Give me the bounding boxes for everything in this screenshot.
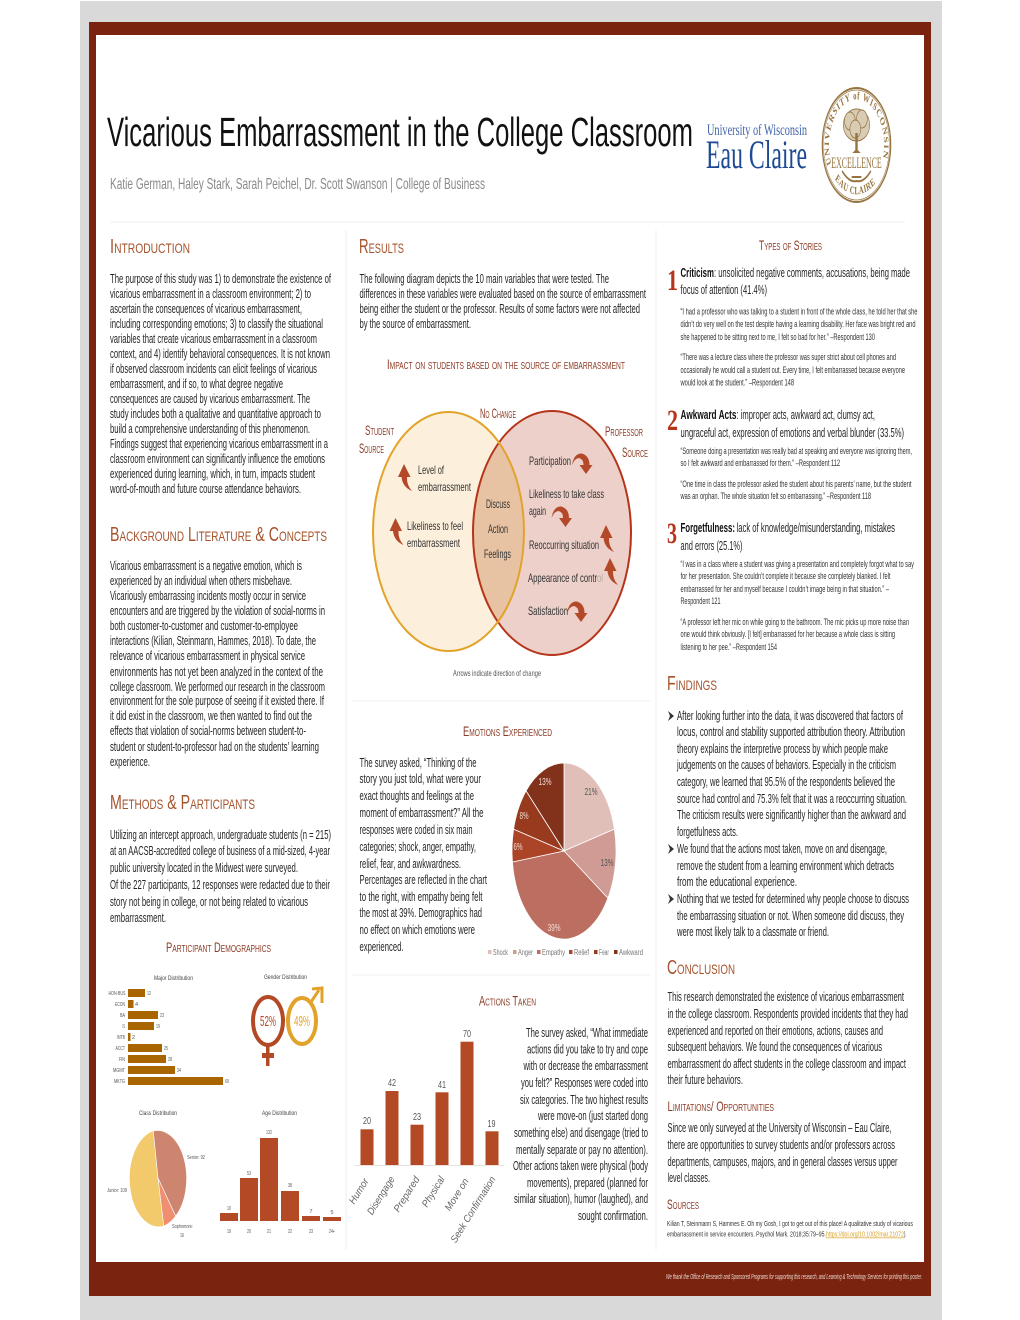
venn diagram: Reoccurring situation <box>529 538 599 552</box>
text block: introduction: word-of-mouth and future course attendance behaviors. <box>109 482 301 496</box>
pie chart: class distribution: Senior: 92 <box>187 1155 205 1161</box>
story 3: forgetfulness <box>667 517 914 652</box>
text block: methods: story not being in college, or not being related to vicarious <box>110 895 308 909</box>
heading: methods and participants: Methods & Participants <box>110 792 255 814</box>
bar chart: major distribution: 2 <box>132 1035 135 1041</box>
icon: gender distribution <box>253 975 322 1066</box>
logo: University of Wisconsin Eau Claire: University of Wisconsin <box>707 122 807 139</box>
logo: University of Wisconsin Eau Claire <box>706 122 807 177</box>
bar chart: major distribution: 12 <box>147 991 151 997</box>
heading: findings: Findings <box>667 673 717 695</box>
venn diagram: Action <box>488 522 508 536</box>
bar chart: actions taken: 19 <box>488 1119 496 1130</box>
bar chart: actions taken: 42 <box>388 1078 396 1089</box>
bar chart: age distribution <box>220 1111 341 1235</box>
text block: introduction: context, and 4) identify behavioral consequences. It is not known <box>110 347 330 361</box>
story 1: criticism: focus of attention (41.4%) <box>680 283 767 297</box>
text block: actions: movements), prepared (planned for <box>527 1176 648 1190</box>
bar chart: age distribution: 22 <box>288 1229 292 1235</box>
icon: university seal <box>822 87 892 203</box>
text block: results: differences in these variables were evaluated based on the source of embarrassment <box>360 287 646 301</box>
text block: background: environment for the sole purpose of seeing if it existed there. If <box>110 694 324 708</box>
pie chart: emotions: 21% <box>584 787 598 798</box>
venn diagram: embarrassment <box>407 536 460 550</box>
bar chart: major distribution: MGMT <box>113 1068 125 1074</box>
arrow: level of embarrassment up <box>398 464 412 491</box>
text block: actions: The survey asked, “What immediate <box>526 1026 648 1040</box>
pie chart: emotions: 39% <box>548 923 561 934</box>
text block: introduction: consequences are caused by vicarious embarrassment. The <box>110 392 310 406</box>
text block: actions: actions did you take to try and cope <box>527 1043 648 1057</box>
text block: introduction: if observed classroom incidents can elicit feelings of vicarious <box>110 362 317 376</box>
venn diagram: Professor <box>605 423 643 439</box>
text block: actions: were move-on (just started dong <box>537 1109 648 1123</box>
caption: arrows note: Arrows indicate direction of change <box>453 668 541 678</box>
text block: background: student or student-to-professor had on the students’ learning <box>110 740 319 754</box>
text block: actions: sought confirmation. <box>578 1209 648 1223</box>
text block: conclusion: experienced and reported on their emotions, actions, causes and <box>668 1024 883 1038</box>
bar chart: major distribution: ECON <box>115 1002 125 1008</box>
text block: results: The following diagram depicts the 10 main variables that were tested. The <box>360 272 609 286</box>
icon: gender distribution: Gender Distribution <box>264 975 307 981</box>
text block: emotions <box>360 756 487 954</box>
text block: background: Vicariously embarrassing incidents mostly occur in service <box>110 589 306 603</box>
text block: results: by the source of embarrassment. <box>360 317 471 331</box>
text block: methods: at an AACSB-accredited college of business of a mid-sized, 4-year <box>110 844 330 858</box>
bar chart: actions taken: Prepared <box>392 1174 423 1215</box>
bar chart: actions taken: 23 <box>413 1112 421 1123</box>
bar chart: age distribution: 5 <box>330 1210 334 1216</box>
venn diagram: again <box>529 504 546 518</box>
icon: university seal: EXCELLENCE <box>831 153 882 172</box>
pie chart: emotions: 13% <box>538 777 552 788</box>
bar chart: actions taken: 41 <box>438 1080 446 1091</box>
text block: background: college classroom. We performed our research in the classroom <box>110 680 325 694</box>
story 3: forgetfulness: one would think obviously. [I felt] embarrassed for her because a whole class is sitting <box>680 629 895 639</box>
story 2: awkward acts: Awkward Acts <box>680 408 737 422</box>
text block: introduction: vicarious embarrassment in a classroom environment; 2) to <box>110 287 311 301</box>
story 2: awkward acts: was an orphan. The whole situation felt so embarrassing.” –Respondent 118 <box>680 491 871 501</box>
heading: results: Results <box>359 236 404 258</box>
venn diagram: Source <box>359 440 384 456</box>
story 3: forgetfulness: embarrassed for her and myself because I couldn’t image being in that situation.” – <box>680 584 889 594</box>
text block: actions: Other actions taken were physical (body <box>513 1159 648 1173</box>
text block: sources: ). <box>904 1232 907 1238</box>
bar chart: major distribution: ACCT <box>116 1046 125 1052</box>
bar chart: major distribution: 19 <box>156 1024 160 1030</box>
pie chart: class distribution: Sophomore: <box>172 1224 193 1230</box>
text block: background: environments has not yet been analyzed in the context of the <box>110 665 323 679</box>
arrow: likeliness to feel up <box>390 518 404 545</box>
text block: introduction: experienced during learning, which, in turn, impacts student <box>110 467 315 481</box>
text block: introduction: including corresponding emotions; 3) to classify the situational <box>110 317 323 331</box>
pie chart: class distribution: Junior: 109 <box>107 1188 127 1194</box>
text block: methods <box>110 828 331 925</box>
icon: gender distribution: 49% <box>294 1013 310 1030</box>
story 3: forgetfulness: listening to her pee.” –Respondent 154 <box>680 642 777 652</box>
text block: background: interactions (Kilian, Steinmann, Hammes, 2018). To date, the <box>110 634 316 648</box>
story 3: forgetfulness: and errors (25.1%) <box>680 539 742 553</box>
pie chart: emotions <box>512 763 616 939</box>
story 2: awkward acts: : improper acts, awkward act, clumsy act, <box>736 408 875 422</box>
story 1: criticism: 1 <box>667 264 678 297</box>
text block: findings: were most likely talk to a classmate or friend. <box>676 925 829 939</box>
text block: sources: embarrassment in service encounters. Psychol Mark. 2018;35:79–95. <box>667 1232 826 1238</box>
heading: background literature and concepts: Background Literature & Concepts <box>110 524 327 546</box>
venn diagram: embarrassment <box>418 480 471 494</box>
venn diagram: Participation <box>529 454 571 468</box>
story 3: forgetfulness: Forgetfulness: <box>680 521 735 535</box>
poster white panel <box>96 35 924 1262</box>
pie chart: emotions: 13% <box>600 858 614 869</box>
venn diagram: Discuss <box>486 497 510 511</box>
bar chart: major distribution <box>108 976 229 1085</box>
text block: emotions: to the right, with empathy being felt <box>360 890 483 904</box>
chart legend: emotions: Anger <box>518 948 533 957</box>
text block: background: experience. <box>110 755 150 769</box>
bar chart: age distribution: 20 <box>247 1229 251 1235</box>
heading: impact on students: Impact on students based on the source of embarrassment <box>387 356 625 372</box>
text block: findings: remove the student from a learning environment which detracts <box>677 859 894 873</box>
bar chart: major distribution: HON-BUS <box>108 991 126 997</box>
text block: conclusion: subsequent behaviors. We found the consequences of vicarious <box>668 1040 882 1054</box>
text block: methods: public university located in the Midwest were surveyed. <box>110 861 298 875</box>
venn diagram: Likeliness to feel <box>407 519 463 533</box>
bar chart: actions taken: Move on <box>443 1176 472 1213</box>
text block: limitations <box>668 1121 898 1185</box>
bar chart: age distribution: 23 <box>309 1229 313 1235</box>
text block: background: it did exist in the classroom, we then wanted to find out the <box>110 709 312 723</box>
bar chart: actions taken <box>347 1029 504 1245</box>
pie chart: class distribution: 16 <box>180 1233 184 1239</box>
bar chart: age distribution: 10 <box>227 1206 231 1212</box>
heading: sources: Sources <box>667 1196 699 1212</box>
bar chart: actions taken: Humor <box>347 1176 372 1206</box>
chart legend: emotions: Shock <box>493 948 509 957</box>
text block: introduction: classroom environment can significantly influence the emotions <box>110 452 325 466</box>
story 1: criticism: “There was a lecture class where the professor was super strict about cell phones and <box>680 352 896 362</box>
chart legend: emotions: Empathy <box>542 948 565 957</box>
panel: left column <box>107 236 341 1239</box>
bar chart: age distribution: 7 <box>309 1209 313 1215</box>
bar chart: major distribution: Major Distribution <box>154 976 193 982</box>
text block: background: encounters and are triggered by the violation of social-norms in <box>110 604 325 618</box>
heading: conclusion: Conclusion <box>667 957 735 979</box>
title: Vicarious Embarrassment in the College Classroom <box>107 109 693 155</box>
text block: results <box>360 272 646 331</box>
venn diagram <box>359 405 648 655</box>
text block: background: effects that violation of social-norms between student-to- <box>110 724 306 738</box>
chart legend: emotions: Fear <box>599 948 609 957</box>
text block: introduction: study includes both a qualitative and quantitative approach to <box>110 407 321 421</box>
text block: actions: with or decrease the embarrassment <box>523 1059 648 1073</box>
story 1: criticism: would look at the student.” –Respondent 148 <box>680 378 794 388</box>
text block: actions: mentally separate or pay no attention). <box>516 1143 648 1157</box>
story 1: criticism <box>667 264 918 388</box>
icon: university seal: UNIVERSITY of WISCONSIN <box>824 92 888 166</box>
arrow: appearance of control up <box>604 558 618 585</box>
bar chart: major distribution: BA <box>120 1013 125 1019</box>
arrow: reoccurring situation up <box>600 525 614 552</box>
logo: University of Wisconsin Eau Claire: Eau Claire <box>706 132 807 177</box>
heading: introduction: Introduction <box>110 236 190 258</box>
story 3: forgetfulness: 3 <box>667 517 677 550</box>
bar chart: major distribution: 69 <box>225 1079 229 1085</box>
text block: findings: forgetfulness acts. <box>677 825 738 839</box>
icon: university seal: EAU CLAIRE <box>835 174 875 194</box>
text block: sources: https://doi.org/10.1002/mar.21072 <box>826 1232 904 1238</box>
text block: results: being either the student or the professor. Results of some factors were not affected <box>360 302 640 316</box>
venn diagram: Level of <box>418 463 444 477</box>
heading: actions taken: Actions Taken <box>479 992 536 1008</box>
story 2: awkward acts: 2 <box>667 404 678 437</box>
text block: sources <box>667 1221 913 1238</box>
pie chart: class distribution: Class Distribution <box>139 1111 177 1117</box>
text block: actions: six categories. The two highest results <box>520 1093 648 1107</box>
text block: actions: similar situation), humor (laughed), and <box>514 1192 648 1206</box>
heading: limitations and opportunities: Limitations/ Opportunities <box>668 1098 774 1114</box>
arrow: likeliness to take class down <box>552 506 572 527</box>
text block: conclusion <box>668 990 908 1087</box>
arrow: participation down <box>572 453 592 474</box>
icon: gender distribution: 52% <box>260 1013 276 1030</box>
text block: emotions: relief, fear, and awkwardness. <box>360 857 461 871</box>
text block: background: both customer-to-customer and customer-to-employee <box>110 619 298 633</box>
bar chart: actions taken: 20 <box>363 1116 371 1127</box>
bar chart: age distribution: 21 <box>267 1229 271 1235</box>
bar chart: major distribution: 34 <box>177 1068 181 1074</box>
text block: emotions: responses were coded in six main <box>360 823 473 837</box>
arrow: satisfaction down <box>567 601 588 622</box>
venn diagram: Feelings <box>484 547 511 561</box>
text block: emotions: exact thoughts and feelings at the <box>360 789 474 803</box>
text block: actions: you felt?” Responses were coded into <box>521 1076 648 1090</box>
heading: emotions experienced: Emotions Experienced <box>463 723 552 739</box>
venn diagram: Likeliness to take class <box>529 487 604 501</box>
venn diagram: Appearance of control <box>528 571 603 585</box>
venn diagram: No Change <box>480 405 516 421</box>
chart legend: emotions: Awkward <box>619 948 643 957</box>
text block: introduction: embarrassment, and if so, to what degree negative <box>110 377 283 391</box>
bar chart: major distribution: IS <box>122 1024 125 1030</box>
text block: sources: Kilian T, Steinmann S, Hammes E. Oh my Gosh, I got to get out of this place! A qualitative study of vicarious <box>667 1221 913 1228</box>
text block: findings <box>668 709 909 939</box>
panel: right column <box>667 237 918 1238</box>
venn diagram: Source <box>622 444 648 460</box>
chart legend: emotions: Relief <box>574 948 590 957</box>
bar chart: age distribution: 53 <box>247 1171 251 1177</box>
venn diagram: Student <box>365 422 394 438</box>
text block: findings: We found that the actions most taken, move on and disengage, <box>677 842 887 856</box>
text block: introduction: Findings suggest that experiencing vicarious embarrassment in a <box>110 437 328 451</box>
text block: conclusion: their future behaviors. <box>668 1073 743 1087</box>
bar chart: actions taken: Seek Confirmation <box>449 1174 499 1245</box>
bar chart: major distribution: FIN <box>119 1057 125 1063</box>
bar chart: age distribution: 132 <box>266 1130 272 1136</box>
bar chart: age distribution: 19 <box>227 1229 231 1235</box>
text block: introduction: The purpose of this study was 1) to demonstrate the existence of <box>110 272 331 286</box>
story 2: awkward acts: so I felt awkward and embarrassed for them.” –Respondent 112 <box>680 458 840 468</box>
text block: background: experienced by an individual when others misbehave. <box>110 574 292 588</box>
text block: emotions: The survey asked, “Thinking of the <box>360 756 477 770</box>
bar chart: major distribution: INTB <box>117 1035 125 1041</box>
text block: methods: embarrassment. <box>110 911 166 925</box>
text block: methods: Of the 227 participants, 12 responses were redacted due to their <box>110 878 330 892</box>
bar chart: major distribution: 4 <box>135 1002 138 1008</box>
story 1: criticism: she happened to be sitting next to me, I felt so bad for her.” –Respondent 130 <box>680 332 875 342</box>
bar chart: age distribution: 24+ <box>329 1229 335 1235</box>
text block: introduction <box>109 272 331 496</box>
pie chart: class distribution <box>107 1111 205 1239</box>
bar chart: major distribution: 28 <box>168 1057 172 1063</box>
text block: background <box>110 559 325 769</box>
bar chart: actions taken: 70 <box>463 1029 471 1040</box>
heading: types of stories: Types of Stories <box>759 237 822 253</box>
pie chart: emotions: 8% <box>520 811 529 822</box>
bar chart: actions taken: Disengage <box>365 1174 398 1217</box>
text block: findings: theory explains the interpretive process by which people make <box>677 742 888 756</box>
story 1: criticism: Criticism <box>680 266 714 280</box>
text block: background: relevance of vicarious embarrassment in physical service <box>110 649 305 663</box>
text block: methods: Utilizing an intercept approach, undergraduate students (n = 215) <box>110 828 331 842</box>
bar chart: age distribution: 38 <box>288 1183 292 1189</box>
story 3: forgetfulness: Respondent 121 <box>680 596 720 606</box>
poster frame <box>89 22 931 1296</box>
panel: middle column <box>347 236 648 1245</box>
story 3: forgetfulness: for her presentation. She couldn’t complete it because she completely blanked. I felt <box>680 571 891 581</box>
pie chart: emotions: 6% <box>514 842 523 853</box>
text block: actions <box>513 1026 648 1223</box>
text block: emotions: categories; shock, anger, empathy, <box>360 840 476 854</box>
story 2: awkward acts <box>667 404 912 501</box>
text block: emotions: no effect on which emotions were <box>360 923 475 937</box>
heading: participant demographics: Participant Demographics <box>166 939 271 955</box>
text block: introduction: ascertain the consequences of vicarious embarrassment, <box>110 302 302 316</box>
bar chart: age distribution: Age Distribution <box>262 1111 297 1117</box>
authors: Katie German, Haley Stark, Sarah Peichel, Dr. Scott Swanson | College of Business <box>110 176 485 193</box>
chart legend: emotions <box>488 948 643 957</box>
venn diagram: Satisfaction <box>528 604 568 618</box>
text block: introduction: variables that create vicarious embarrassment in a classroom <box>110 332 317 346</box>
text block: introduction: build a comprehensive understanding of this phenomenon. <box>110 422 310 436</box>
bar chart: major distribution: MKTG <box>114 1079 125 1085</box>
text block: limitations: level classes. <box>668 1171 710 1185</box>
text block: emotions: experienced. <box>360 940 404 954</box>
bar chart: actions taken: Physical <box>420 1174 448 1209</box>
text block: actions: something else) and disengage (tried to <box>514 1126 648 1140</box>
bar chart: major distribution: 25 <box>164 1046 168 1052</box>
text block: findings: from the educational experience. <box>677 875 797 889</box>
text block: emotions: Percentages are reflected in the chart <box>360 873 487 887</box>
story 3: forgetfulness: lack of knowledge/misunderstanding, mistakes <box>736 521 895 535</box>
text block: emotions: the most at 39%. Demographics had <box>360 906 482 920</box>
text block: emotions: story you just told, what were your <box>360 772 481 786</box>
text block: background: Vicarious embarrassment is a negative emotion, which is <box>110 559 302 573</box>
text block: emotions: moment of embarrassment?” All the <box>360 806 484 820</box>
bar chart: major distribution: 23 <box>160 1013 164 1019</box>
